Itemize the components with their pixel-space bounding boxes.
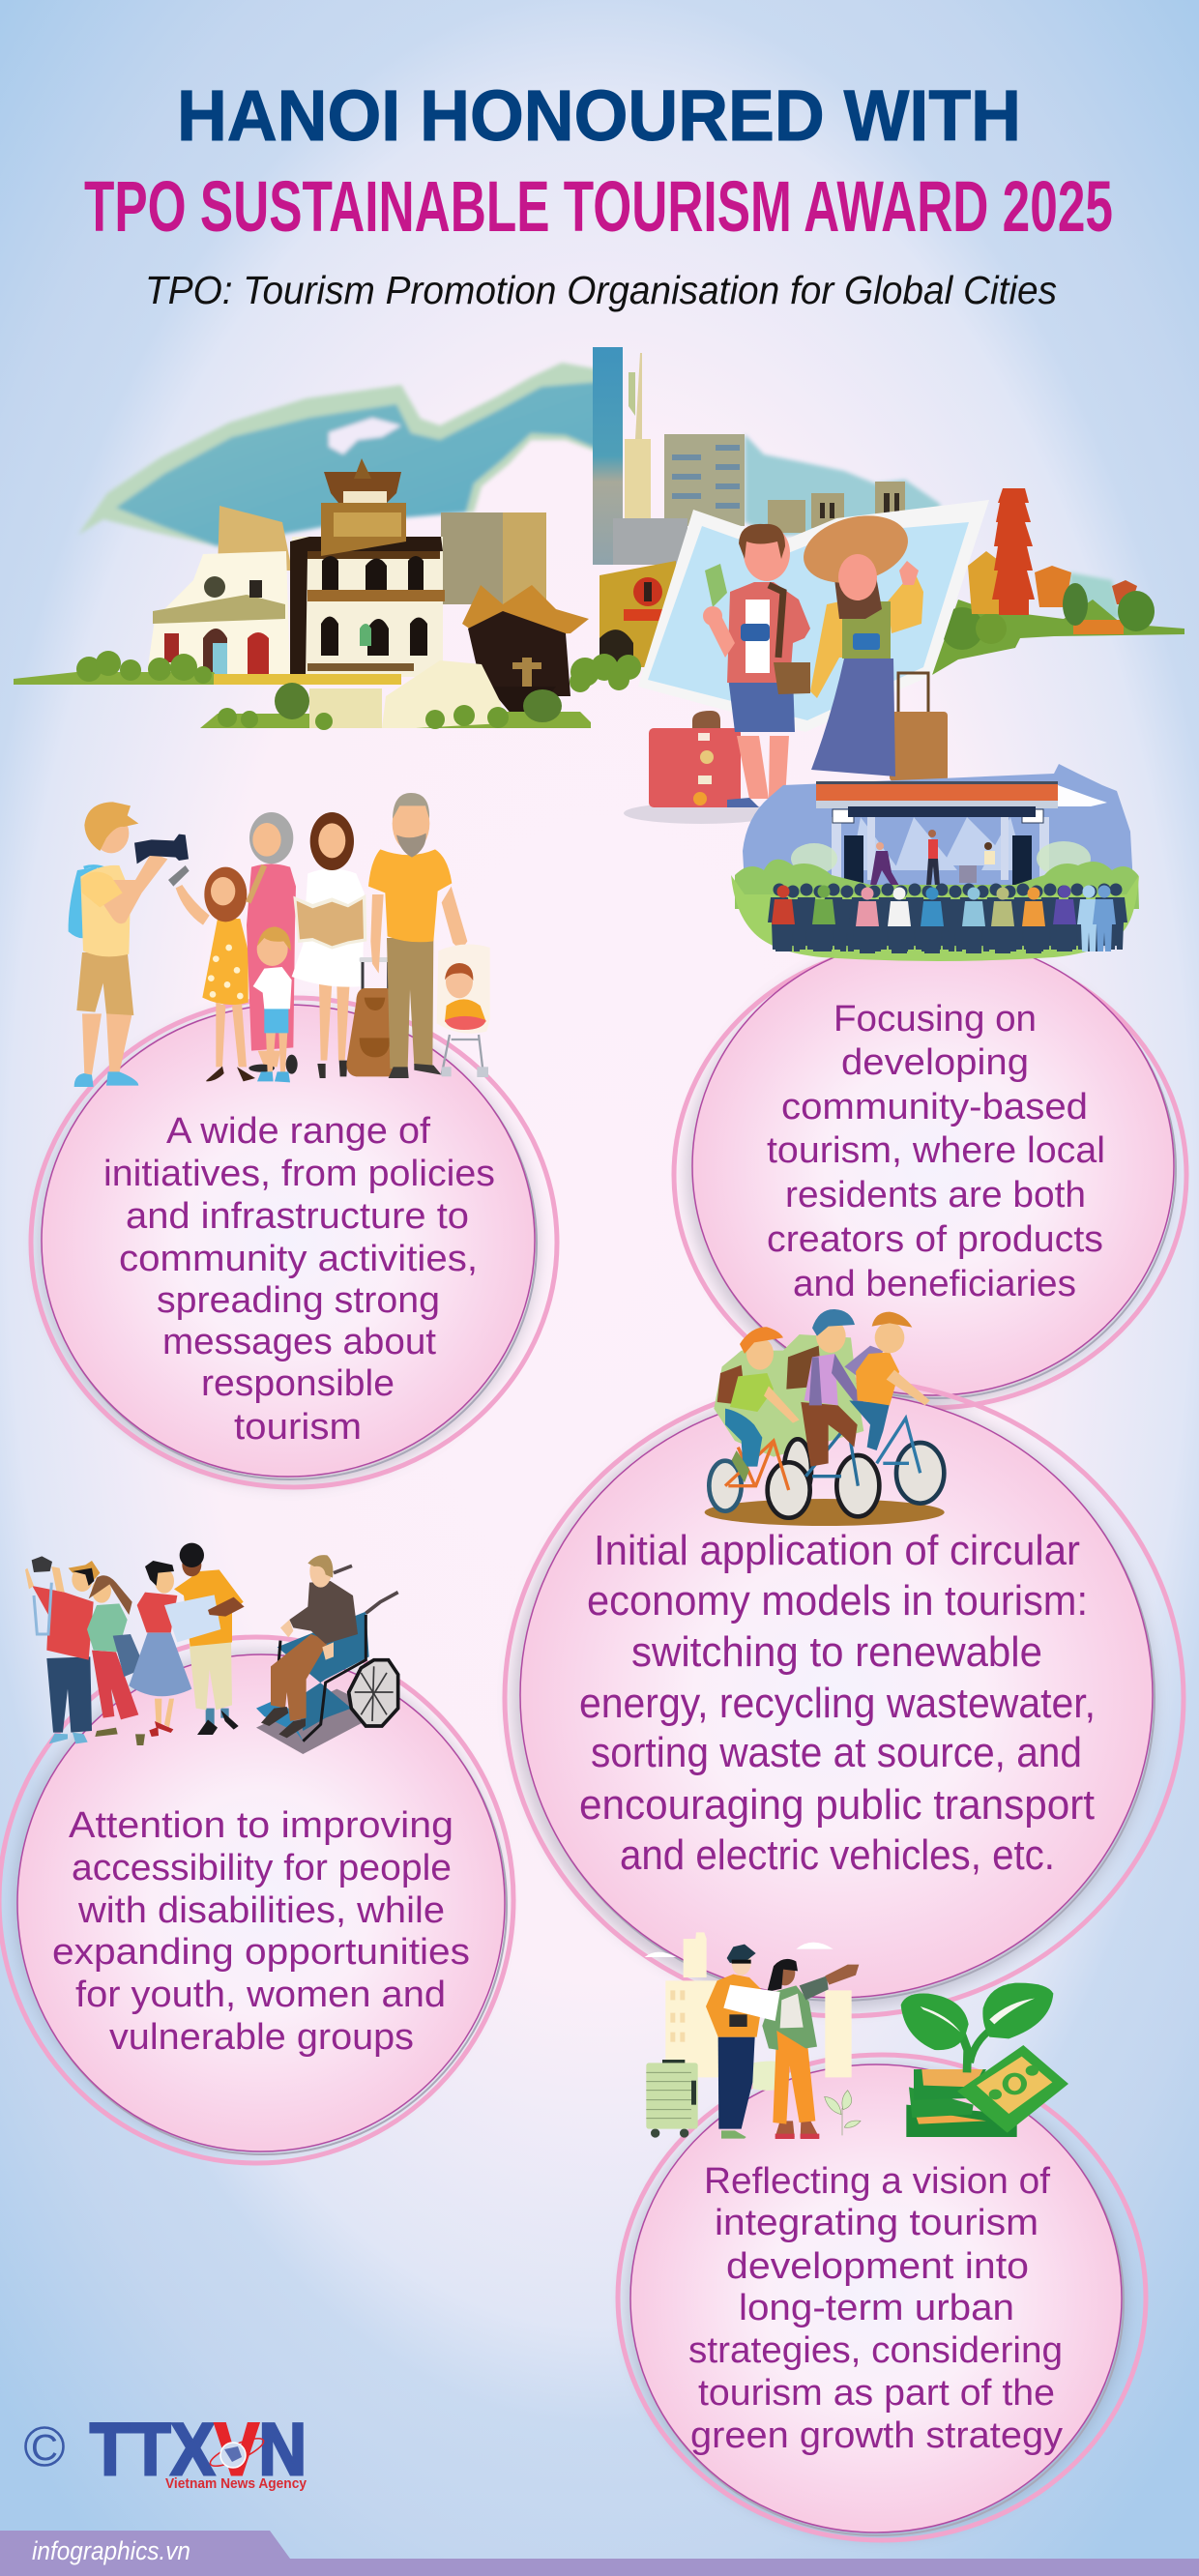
logo: TTXVN [25,2409,307,2492]
crowd highlights [772,886,1116,953]
wheelchair user [256,1555,398,1754]
text block: expanding opportunities [52,1932,470,1973]
text block: accessibility for people [72,1848,452,1888]
circle [674,937,1186,1408]
text block: and electric vehicles, etc. [620,1831,1055,1879]
text block: and infrastructure to [126,1196,469,1237]
watercolour sky [78,363,1122,619]
stage truss towers [832,817,1049,885]
text block: developing [841,1042,1029,1083]
old city gate [147,506,292,674]
father [368,793,467,1078]
website: infographics.vn [32,2536,190,2565]
smoke and bushes [731,841,1139,961]
grandmother [247,812,298,1074]
text block: Reflecting a vision of [704,2161,1050,2202]
copyright mark: C [31,2428,58,2469]
text block: tourism [234,1407,362,1448]
bag and plant [752,2061,789,2091]
small towers [768,482,905,533]
ground shadow [624,803,778,824]
bush [714,1334,863,1457]
panel: community-based tourism [674,764,1186,1408]
text block: encouraging public transport [579,1781,1095,1829]
sky [743,764,1133,885]
wordmark: TTXVN [90,2409,307,2491]
tourist in skirt [129,1561,191,1737]
suitcase: brown [890,673,948,781]
text block [767,999,1105,1304]
text block: initiatives, from policies [103,1154,495,1194]
mother [292,812,366,1078]
text block: A wide range of [166,1111,430,1152]
glass towers [593,347,623,565]
grey building [441,512,546,604]
speakers [844,835,1032,890]
text block: tourism as part of the [698,2373,1055,2414]
crowd [768,884,1127,951]
icon: cyclists [705,1309,945,1526]
title [84,75,1113,312]
rider three [844,1312,930,1450]
bike frames [725,1441,789,1490]
text block [103,1111,495,1448]
text block: messages about [162,1322,436,1362]
icon: music festival stage [731,764,1139,961]
copyright mark [25,2427,64,2469]
text block: energy, recycling wastewater, [579,1680,1096,1727]
text block: spreading strong [157,1280,440,1321]
text block: responsible [201,1363,395,1404]
woman [797,506,923,776]
icon: family of tourists [69,793,490,1087]
red-yellow temple [600,561,676,677]
suitcase: family [346,957,401,1076]
Tran Quoc pagoda and greenery [932,488,1184,675]
rider two [786,1309,867,1467]
grass and bushes [14,651,641,730]
Turtle Tower [290,458,445,677]
text block: for youth, women and [75,1975,446,2015]
text block: tourism, where local [767,1130,1105,1171]
illustration: travellers with map [624,500,989,824]
text block: Focusing on [833,999,1037,1039]
text block: Initial application of circular [594,1527,1080,1574]
text block [688,2161,1063,2456]
green suitcase [646,2060,698,2138]
suitcase: red [649,711,741,807]
text block: community activities, [119,1239,478,1279]
subtitle: TPO: Tourism Promotion Organisation for Global Cities [145,268,1057,312]
man with map [706,1945,764,2139]
girl [176,867,255,1081]
illustration: Hanoi skyline [14,347,1184,730]
panel: accessibility [0,1543,513,2163]
boy [253,926,292,1082]
city buildings and clouds [645,1932,852,2077]
folded map [723,1985,780,2021]
text block: economy models in tourism: [587,1577,1088,1625]
wheels [709,1439,944,1518]
woman pointing [762,1959,859,2139]
text block: development into [726,2246,1029,2287]
circle [0,1637,513,2163]
text block [579,1527,1096,1879]
ground [705,1499,945,1526]
circle [618,2055,1146,2540]
tourist with camera [25,1556,100,1743]
circle [31,998,557,1487]
tagline: Vietnam News Agency [165,2475,307,2492]
One Pillar Pagoda [462,585,589,716]
panel: long-term urban strategies [618,1932,1146,2540]
seedling and money [901,1983,1068,2137]
text block: and beneficiaries [793,1264,1076,1304]
heading: line one: HANOI HONOURED WITH [177,75,1021,156]
stage lights [851,817,1025,870]
panel: circular economy [505,1309,1184,2016]
text block: integrating tourism [715,2203,1038,2243]
panel: wide range of initiatives [31,793,557,1487]
map [638,500,989,732]
text block: green growth strategy [690,2415,1063,2456]
text block: community-based [781,1087,1088,1127]
text block: strategies, considering [688,2330,1063,2371]
photographer [69,802,190,1087]
text block: residents are both [785,1175,1086,1215]
icon: young tourists and wheelchair user [25,1543,398,1754]
man [703,524,810,810]
performers [870,830,995,886]
tourist with tote bag [87,1575,145,1745]
text block: vulnerable groups [109,2017,414,2058]
text block: creators of products [767,1219,1103,1260]
text block: long-term urban [739,2288,1014,2328]
text block: Attention to improving [69,1805,453,1846]
circle [505,1380,1184,2016]
globe [207,2433,267,2472]
tourist with map [164,1543,245,1735]
text block [52,1805,470,2058]
rider one [717,1327,800,1482]
stage roof [816,782,1058,803]
icon: tourists in the city [645,1932,1068,2139]
text block: switching to renewable [631,1628,1042,1676]
baby stroller [437,945,490,1077]
text block: sorting waste at source, and [591,1729,1082,1776]
text block: with disabilities, while [77,1890,445,1931]
footer band [0,2531,1199,2576]
